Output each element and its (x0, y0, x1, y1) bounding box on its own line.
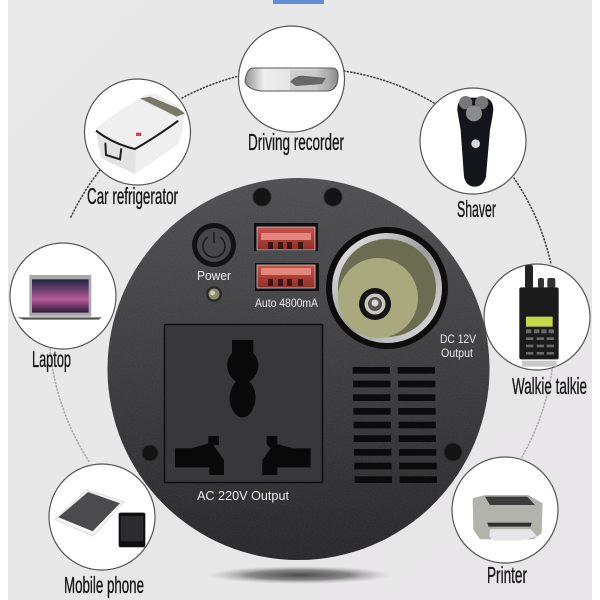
label: mobile phone: Mobile phone (64, 572, 144, 598)
label: printer: Printer (487, 562, 527, 588)
USB port top (254, 223, 318, 251)
AC socket panel (164, 324, 322, 482)
power button (192, 223, 236, 267)
label: shaver: Shaver (457, 196, 496, 222)
DC output label: DC 12V (440, 332, 476, 346)
icon: driving recorder mirror (238, 26, 344, 132)
icon: laptop (10, 243, 116, 349)
indicator LED (206, 286, 222, 302)
icon: tablet and mobile phone (49, 464, 155, 570)
DC output label (440, 332, 476, 360)
icon: shaver (420, 88, 526, 194)
floating shadow under device (208, 566, 392, 584)
device disc (100, 170, 500, 570)
label: driving recorder: Driving recorder (248, 129, 344, 155)
label: laptop: Laptop (32, 346, 71, 372)
power label: Power (197, 269, 231, 283)
label: car refrigerator: Car refrigerator (87, 183, 178, 209)
icon: walkie talkie (484, 264, 590, 370)
USB label: Auto 4800mA (255, 296, 318, 310)
AC output label: AC 220V Output (197, 488, 289, 503)
USB port bottom (255, 263, 319, 291)
icon: printer (452, 457, 558, 563)
top blue accent bar (273, 0, 324, 4)
dotted connector ring (50, 71, 552, 463)
DC output label: Output (441, 346, 474, 360)
cigarette lighter socket (326, 227, 448, 349)
screws (142, 188, 462, 461)
ventilation slots (353, 367, 437, 483)
icon: car refrigerator (84, 79, 190, 185)
